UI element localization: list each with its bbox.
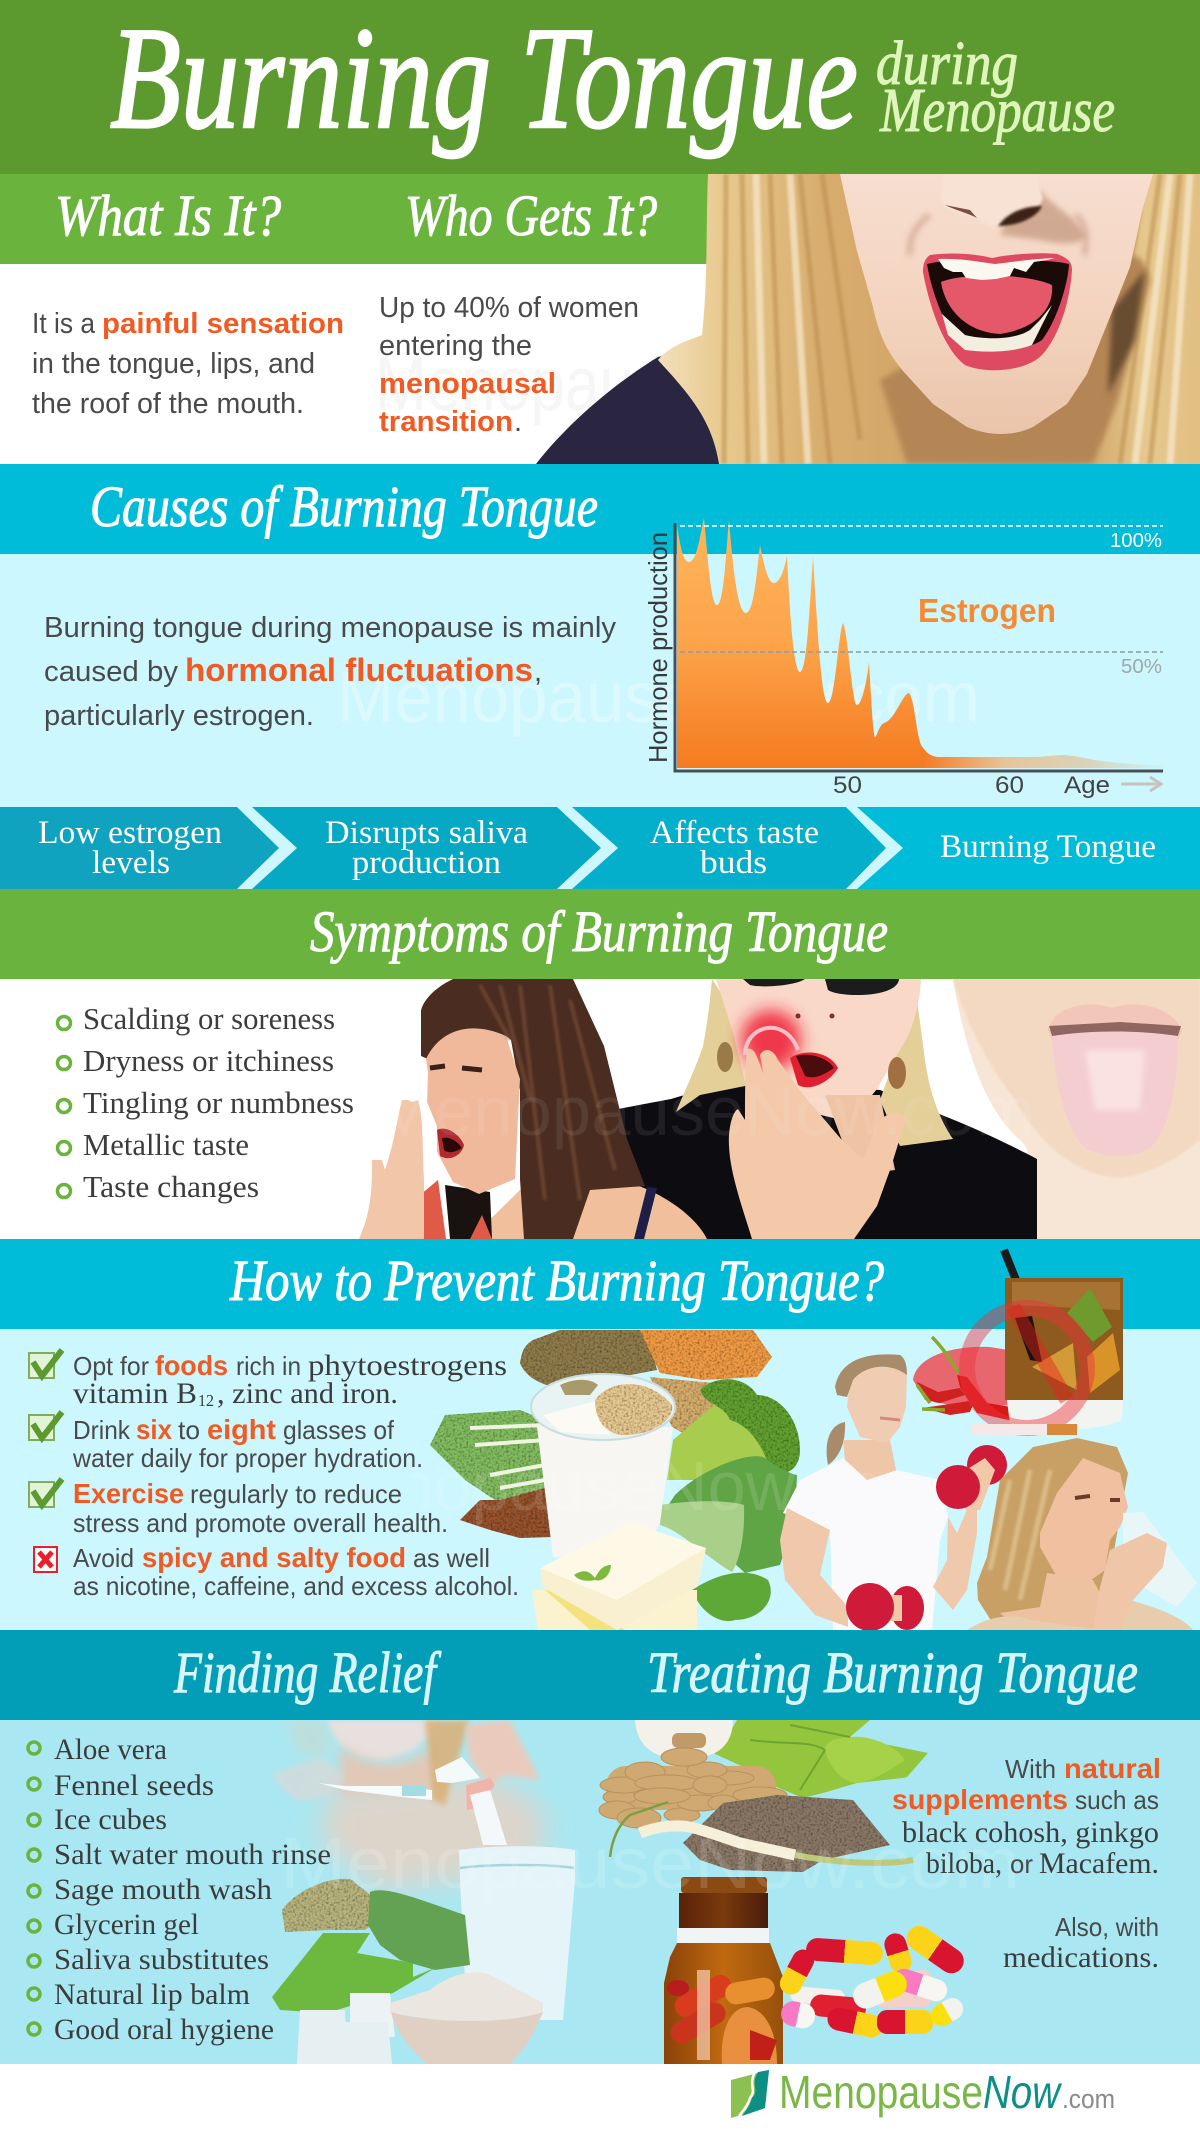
salt bowl — [390, 1972, 543, 2064]
50% line — [680, 651, 1163, 653]
step: low estrogen levels: Low estrogen — [38, 815, 222, 851]
panel: how to prevent — [0, 1239, 1200, 1630]
exercising woman — [780, 1354, 1007, 1631]
text: foods: vitamin B — [73, 1377, 197, 1410]
prevention advice — [29, 1349, 519, 1601]
process arrows — [0, 807, 1200, 889]
step: low estrogen levels — [38, 815, 222, 881]
text: who gets it: menopausal — [379, 368, 556, 400]
text: who gets it: Up to 40% of women — [379, 292, 639, 324]
check: exercise — [29, 1479, 62, 1507]
text: treating with medications — [1003, 1912, 1159, 1974]
step: burning tongue: Burning Tongue — [940, 829, 1156, 865]
finding relief list: Good oral hygiene — [54, 2013, 274, 2046]
panel: what is it and who gets it — [0, 174, 955, 438]
woman with brown hair — [359, 979, 707, 1239]
cocktail glass — [1004, 1250, 1123, 1430]
text: water: eight — [207, 1414, 276, 1445]
watermark: MenopauseNow.com — [337, 658, 980, 738]
text: exercise: regularly to reduce — [190, 1479, 402, 1509]
watermark: MenopauseNow.com — [280, 1824, 1020, 1904]
text: treating with medications: medications. — [1003, 1941, 1159, 1974]
brown lentils — [520, 1330, 657, 1387]
finding relief list: Aloe vera — [54, 1733, 167, 1766]
icon: red cross box — [34, 1547, 57, 1572]
photo: symptoms women and tongue — [359, 979, 1200, 1239]
text: treating with supplements — [892, 1753, 1161, 1880]
label: estrogen: Estrogen — [918, 592, 1056, 629]
text: foods: Opt for — [73, 1351, 149, 1381]
text: treating with supplements: With — [1005, 1754, 1056, 1784]
symptoms list: Dryness or itchiness — [83, 1043, 334, 1078]
title: Burning Tongue — [110, 0, 858, 159]
subtitle — [876, 30, 1115, 145]
watermark: MenopauseNow.com — [375, 1072, 1035, 1150]
arrow: age — [1121, 777, 1161, 791]
red lentils — [640, 1330, 772, 1380]
logo icon — [731, 2070, 769, 2118]
text: causes: hormonal fluctuations — [185, 652, 533, 688]
text: what is it — [32, 308, 344, 420]
photos: relief and treatment — [270, 1720, 1020, 2064]
heading: prevent: How to Prevent Burning Tongue? — [229, 1248, 884, 1313]
soybeans — [650, 1377, 714, 1432]
text: what is it: in the tongue, lips, and — [32, 348, 315, 380]
symptoms list — [58, 1001, 354, 1204]
title banner — [0, 0, 1200, 174]
watermark: MenopauseNow.com — [375, 342, 955, 427]
text: water: Drink — [73, 1415, 131, 1445]
text: what is it: the roof of the mouth. — [32, 388, 304, 420]
text: avoid: Avoid — [73, 1543, 134, 1573]
heading: who gets it: Who Gets It? — [405, 183, 657, 248]
text: treating with medications: Also, with — [1055, 1912, 1159, 1942]
label: 50%: 50% — [1121, 656, 1162, 678]
milk glass — [531, 1374, 675, 1560]
drinking woman — [967, 1438, 1197, 1630]
ice cubes — [297, 1993, 395, 2064]
sage leaves — [368, 1890, 470, 1970]
symptoms list: Metallic taste — [83, 1127, 249, 1162]
fennel seeds — [282, 1878, 370, 1932]
text: treating with supplements: such as — [1075, 1785, 1159, 1815]
panel: symptoms — [0, 889, 1200, 1204]
text: causes: , — [534, 656, 542, 688]
tofu — [532, 1522, 706, 1630]
heading: finding relief: Finding Relief — [173, 1640, 441, 1705]
roots — [683, 1795, 890, 1872]
chart: estrogen production by age — [643, 518, 1163, 799]
text: who gets it: transition — [379, 406, 513, 438]
panel: finding relief and treating — [0, 1630, 1200, 2064]
text: avoid: spicy and salty food — [142, 1542, 406, 1573]
logo wordmark: .com — [1062, 2084, 1115, 2114]
finding relief list: Sage mouth wash — [54, 1873, 272, 1906]
peas — [692, 1573, 771, 1621]
text: treating with supplements: Macafem. — [1039, 1847, 1159, 1880]
amber bottle — [664, 1877, 783, 2064]
finding relief list: Natural lip balm — [54, 1978, 250, 2011]
text: foods: foods — [155, 1350, 228, 1381]
text: foods: rich in — [236, 1351, 301, 1381]
ginkgo leaves — [713, 1720, 928, 1798]
tick: 50: 50 — [833, 772, 862, 799]
capsules — [776, 1921, 969, 2040]
text: causes: caused by — [44, 656, 179, 688]
broccoli — [667, 1379, 800, 1480]
y axis and x axis — [675, 523, 1163, 771]
cigarette — [972, 1424, 1077, 1435]
logo: MenopauseNow.com — [731, 2066, 1115, 2118]
dumbbell: lower — [846, 1583, 924, 1631]
area: estrogen curve — [677, 518, 922, 768]
step: disrupts saliva production: Disrupts saliva — [325, 815, 528, 851]
text: treating with supplements: biloba, — [926, 1847, 1002, 1880]
symptoms list: Tingling or numbness — [83, 1085, 354, 1120]
step: affects taste buds: buds — [700, 845, 767, 881]
text: exercise — [73, 1478, 448, 1538]
step: disrupts saliva production: production — [352, 845, 501, 881]
text: avoid: as nicotine, caffeine, and excess alcohol. — [73, 1571, 519, 1601]
finding relief list: Fennel seeds — [54, 1769, 214, 1802]
flax seeds — [460, 1488, 552, 1538]
logo wordmark: Now — [983, 2066, 1062, 2118]
text: foods: phytoestrogens — [308, 1349, 507, 1382]
photo: woman with open mouth — [536, 174, 1200, 464]
text: treating with supplements: black cohosh, ginkgo — [902, 1816, 1159, 1849]
panel: causes of burning tongue — [0, 464, 1200, 807]
step: disrupts saliva production — [325, 815, 528, 881]
pill jar — [635, 1720, 733, 1757]
chili and meat — [913, 1336, 1010, 1420]
text: avoid — [73, 1542, 519, 1601]
dumbbell: upper — [936, 1445, 1007, 1510]
heading: what is it: What Is It? — [55, 183, 281, 248]
text: treating with supplements: supplements — [892, 1784, 1068, 1815]
text: water: glasses of — [283, 1415, 395, 1445]
text: foods: 12 — [198, 1391, 214, 1410]
no-drink sign — [967, 1307, 1087, 1428]
text: causes: particularly estrogen. — [44, 700, 314, 732]
watermark: MenopauseNow.com — [300, 1447, 940, 1525]
aloe vera — [272, 1933, 437, 2013]
symptoms list: Taste changes — [83, 1169, 259, 1204]
label: age: Age — [1064, 772, 1110, 799]
tick: 60: 60 — [995, 772, 1024, 799]
label: 100%: 100% — [1110, 530, 1162, 552]
woman with hand on jaw — [618, 979, 1037, 1239]
check: foods — [29, 1350, 62, 1378]
text: what is it: It is a — [32, 308, 96, 340]
text: who gets it: entering the — [379, 330, 532, 362]
step: affects taste buds: Affects taste — [650, 815, 819, 851]
text: exercise: Exercise — [73, 1478, 184, 1509]
text: who gets it: . — [514, 406, 522, 438]
logo wordmark: Menopause — [779, 2066, 983, 2118]
subtitle: Menopause — [879, 77, 1115, 145]
text: water: to — [178, 1415, 200, 1445]
finding relief list: Saliva substitutes — [54, 1943, 269, 1976]
toothbrush woman — [270, 1720, 545, 1890]
white flower stalk — [610, 1802, 913, 1863]
text: what is it: painful sensation — [102, 308, 344, 340]
text: avoid: as well — [413, 1543, 490, 1573]
text: who gets it — [379, 292, 639, 438]
tongue face — [953, 979, 1200, 1239]
finding relief list — [28, 1733, 331, 2046]
sprouts — [430, 1410, 545, 1500]
text: foods: , zinc and iron. — [217, 1377, 398, 1410]
label: hormone production: Hormone production — [643, 532, 673, 763]
text: treating with supplements: natural — [1064, 1753, 1161, 1784]
heading: causes: Causes of Burning Tongue — [90, 474, 598, 539]
herbal tablets — [599, 1748, 787, 1828]
subtitle: during — [876, 30, 1018, 98]
area: estrogen tail — [921, 745, 1163, 768]
step: low estrogen levels: levels — [92, 845, 170, 881]
finding relief list: Ice cubes — [54, 1803, 167, 1836]
100% line — [680, 525, 1163, 527]
text: exercise: stress and promote overall health. — [73, 1508, 448, 1538]
text: treating with supplements: or — [1010, 1849, 1033, 1879]
text: foods — [73, 1349, 507, 1410]
step: affects taste buds — [650, 815, 819, 881]
text: causes — [44, 612, 616, 732]
heading: symptoms: Symptoms of Burning Tongue — [310, 899, 888, 964]
finding relief list: Salt water mouth rinse — [54, 1838, 331, 1871]
symptoms list: Scalding or soreness — [83, 1001, 335, 1036]
photo: healthy foods — [430, 1248, 1197, 1630]
text: water: six — [136, 1414, 172, 1445]
water glass — [459, 1846, 575, 2020]
finding relief list: Glycerin gel — [54, 1908, 199, 1941]
text: causes: Burning tongue during menopause is mainly — [44, 612, 616, 644]
text: water — [72, 1414, 423, 1473]
text: water: water daily for proper hydration. — [72, 1443, 423, 1473]
check: water — [29, 1412, 62, 1440]
leafy greens — [660, 1456, 797, 1573]
